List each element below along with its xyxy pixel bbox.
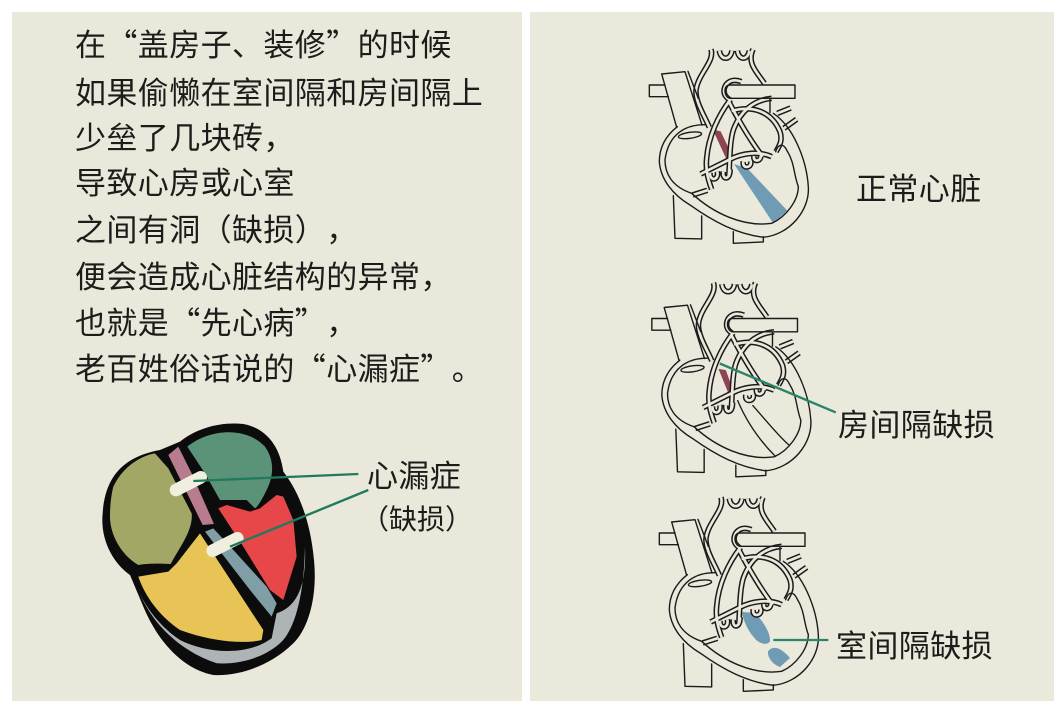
diagram: normal heart: [649, 49, 808, 243]
heart outer wall: [102, 424, 315, 675]
illustration: simplified heart with defects: [102, 424, 368, 675]
text block: explanation of heart defects: 在“盖房子、装修”的时候: [75, 20, 452, 65]
left ventricle yellow: [138, 533, 263, 642]
atrial septum pink: [168, 447, 214, 525]
pointer line to atrial defect: [720, 363, 836, 412]
upper defect patch: [176, 477, 201, 490]
label: normal heart: 正常心脏: [856, 164, 982, 209]
label: heart leak: 心漏症: [367, 451, 461, 496]
pointer line to lower defect: [230, 490, 368, 547]
text block: explanation of heart defects: [75, 20, 483, 389]
text block: explanation of heart defects: 老百姓俗话说的“心漏症”。: [75, 344, 483, 389]
text block: explanation of heart defects: 导致心房或心室: [75, 158, 295, 203]
pointer line to upper defect: [193, 474, 358, 481]
right atrium chamber teal: [187, 432, 272, 508]
septum: ventricular blue: [734, 164, 787, 223]
label: atrial septal defect: 房间隔缺损: [838, 400, 995, 445]
panel: left explanation: [12, 12, 522, 701]
text block: explanation of heart defects: 之间有洞（缺损），: [75, 205, 358, 250]
septum: atrial red: [713, 129, 732, 163]
right ventricle red: [218, 495, 297, 600]
text block: explanation of heart defects: 也就是“先心病”，: [75, 298, 358, 343]
ventricular septum blue-grey: [205, 528, 277, 617]
pointer line to ventricular defect: [773, 636, 828, 643]
diagram: ventricular septal defect heart: [659, 497, 828, 691]
septum upper blue: [742, 612, 770, 644]
label: defect in parentheses: （缺损）: [361, 498, 473, 538]
text block: explanation of heart defects: 少垒了几块砖，: [75, 113, 295, 158]
lower grey crescent: [138, 547, 305, 664]
text block: explanation of heart defects: 如果偷懒在室间隔和房间隔上: [75, 68, 483, 113]
panel: right heart comparison: [530, 12, 1054, 701]
left atrium chamber olive: [110, 453, 192, 565]
septum lower blue: [768, 648, 790, 667]
label: ventricular septal defect: 室间隔缺损: [836, 621, 993, 666]
text block: explanation of heart defects: 便会造成心脏结构的异常，: [75, 252, 452, 297]
septum remnant red: [718, 369, 732, 395]
septum outline: [737, 400, 789, 457]
lower defect patch: [213, 538, 237, 551]
diagram: atrial septal defect heart: [652, 283, 836, 477]
